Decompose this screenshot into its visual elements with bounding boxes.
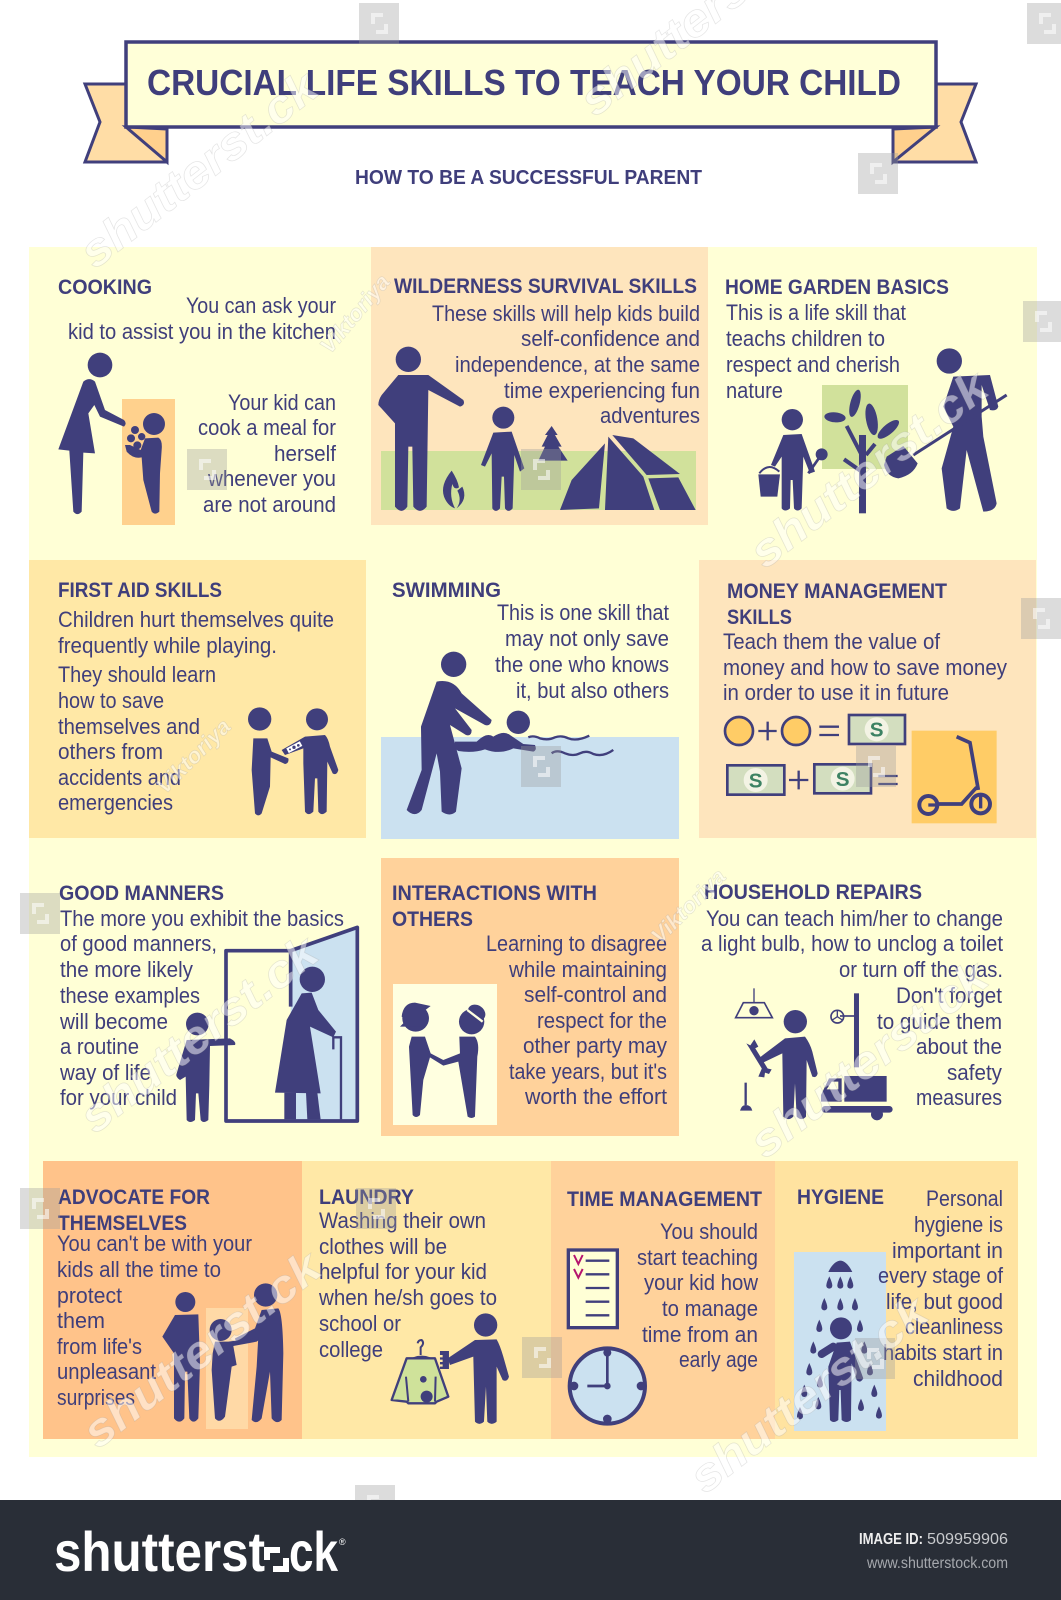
icon: adults protecting child [162,1283,283,1422]
advocate background [43,1161,302,1439]
image id: IMAGE ID: [859,1531,923,1548]
watermark overlay: shutterst.ck [739,949,999,1168]
first aid text [58,607,334,815]
interactions text [486,931,667,1109]
hygiene heading: HYGIENE [797,1186,884,1209]
first aid text: emergencies [58,790,173,815]
good manners text: will become [59,1009,168,1034]
first aid text: accidents and [58,765,181,790]
cooking text: Your kid can [228,390,336,415]
good manners text: a routine [60,1034,139,1059]
icon: money equation and scooter: S [836,768,850,791]
footer bar [0,1500,1061,1600]
first aid text: how to save [58,688,164,713]
laundry text: helpful for your kid [319,1259,487,1284]
main background panel [29,247,1037,1457]
icon: checklist [568,1250,617,1328]
household heading: HOUSEHOLD REPAIRS [704,881,922,904]
wilderness text: self-confidence and [521,326,700,351]
first aid text: They should learn [58,662,216,687]
interactions text: self-control and [524,982,667,1007]
money heading: MONEY MANAGEMENT [727,580,947,603]
interactions text: other party may [523,1033,667,1058]
laundry text: school or [319,1311,401,1336]
hygiene text: important in [892,1238,1003,1263]
swimming heading: SWIMMING [392,579,501,602]
interactions text: respect for the [537,1008,667,1033]
wilderness text: These skills will help kids build [432,301,700,326]
panel: household repairs [701,881,1003,1120]
hygiene text: cleanliness [905,1314,1003,1339]
interactions background [381,858,679,1136]
subtitle: HOW TO BE A SUCCESSFUL PARENT [355,166,702,189]
good manners text: way of life [59,1060,151,1085]
laundry text [318,1208,497,1362]
interactions text: worth the effort [524,1084,667,1109]
panel: swimming [381,579,679,839]
garden text: nature [726,378,783,403]
white picture box [393,984,497,1125]
advocate heading [58,1186,210,1235]
image id [859,1531,1008,1548]
swimming text: This is one skill that [497,600,669,625]
panel: good manners [59,882,357,1122]
panel: first aid skills [29,560,366,838]
cooking text: kid to assist you in the kitchen [68,319,336,344]
website: www.shutterstock.com [866,1555,1008,1572]
first aid text: others from [58,739,163,764]
icon: clock [570,1348,645,1424]
laundry background [302,1161,551,1439]
wilderness green ground [381,451,696,510]
time text: to manage [662,1296,758,1321]
icon: person brushing jacket [392,1313,509,1424]
time text: You should [660,1219,758,1244]
money heading: SKILLS [727,606,792,629]
water [381,737,679,839]
interactions heading: OTHERS [392,908,473,931]
banner main [126,42,936,127]
icon: children with bandage [248,707,338,815]
first aid heading: FIRST AID SKILLS [58,579,222,602]
interactions heading: INTERACTIONS WITH [392,882,597,905]
household text [701,906,1003,1110]
advocate text: protect [57,1283,122,1308]
wilderness background [371,247,708,525]
hygiene text: life, but good [886,1289,1003,1314]
panel: wilderness survival skills [371,247,708,525]
banner left ribbon [85,84,167,162]
time text: time from an [642,1322,758,1347]
title banner [85,42,976,162]
garden text: teachs children to [726,326,885,351]
hygiene text: childhood [913,1366,1003,1391]
icon: gardeners and plant [758,348,1007,513]
advocate text: surprises [57,1385,135,1410]
panel: hygiene [775,1161,1018,1439]
panel: advocate for themselves [43,1161,302,1439]
first aid text: Children hurt themselves quite [58,607,334,632]
money background [699,560,1036,838]
panel: time management [551,1161,775,1439]
cooking heading: COOKING [58,276,152,299]
good manners text: of good manners, [60,931,217,956]
image id: 509959906 [927,1531,1008,1548]
time text [637,1219,758,1372]
time text: start teaching [637,1245,758,1270]
household text: or turn off the gas. [839,957,1003,982]
panel: home garden basics [725,276,1007,513]
footer background [0,1500,1061,1600]
hygiene text: every stage of [878,1263,1004,1288]
laundry text: college [319,1337,383,1362]
advocate heading: THEMSELVES [58,1212,187,1235]
time heading: TIME MANAGEMENT [567,1188,762,1211]
money text [723,629,1007,705]
good manners text: these examples [60,983,200,1008]
advocate text: them [57,1308,105,1333]
icon: mother and child with food [58,353,165,514]
watermark overlay: Viktoriya [646,864,731,949]
icon: repair person with tools [736,988,893,1120]
time background [551,1161,775,1439]
advocate heading: ADVOCATE FOR [58,1186,210,1209]
icon: money equation and scooter [725,715,997,823]
good manners text [59,906,344,1110]
time text: your kid how [644,1270,758,1295]
money text: in order to use it in future [723,680,949,705]
icon: handshake [400,1001,488,1118]
hygiene text: habits start in [883,1340,1003,1365]
swimming text: may not only save [505,626,669,651]
household text: about the [916,1034,1002,1059]
wilderness text [432,301,700,428]
shower blue box [794,1252,886,1431]
interactions text: take years, but it's [509,1059,667,1084]
watermark overlay: Viktoriya [315,269,395,358]
household text: safety [947,1060,1002,1085]
first aid text: frequently while playing. [58,633,277,658]
cooking text: are not around [203,492,336,517]
household text: measures [916,1085,1002,1110]
banner right ribbon [893,84,976,162]
advocate text: kids all the time to [57,1257,221,1282]
garden green box [822,385,908,469]
hygiene text [878,1186,1004,1391]
hygiene text: Personal [926,1186,1003,1211]
household text: You can teach him/her to change [706,906,1003,931]
watermark overlay: shutterst.ck [72,1239,332,1458]
garden text: This is a life skill that [726,300,906,325]
garden text [726,300,906,403]
interactions text: Learning to disagree [486,931,667,956]
advocate light box [206,1308,248,1429]
hygiene background [775,1161,1018,1439]
good manners heading: GOOD MANNERS [59,882,224,905]
cooking text [68,293,337,517]
hygiene text: hygiene is [914,1212,1003,1237]
good manners text: the more likely [60,957,193,982]
icon: child holding door for elderly woman [176,927,357,1122]
advocate text [57,1231,252,1410]
panel: cooking [58,276,337,525]
swimming text: it, but also others [516,678,669,703]
panel: interactions with others [381,858,679,1136]
wilderness heading: WILDERNESS SURVIVAL SKILLS [394,275,697,298]
watermark overlay: shutterst.ck [69,59,329,278]
shutterstock logo: ® [339,1537,346,1547]
wilderness text: adventures [600,403,700,428]
garden heading: HOME GARDEN BASICS [725,276,949,299]
money heading [727,580,947,629]
good manners text: The more you exhibit the basics [60,906,344,931]
watermark overlay: shutterst.ck [739,359,999,578]
icon: child in shower [797,1261,882,1422]
shutterstock logo: ck [289,1520,339,1583]
interactions text: while maintaining [508,957,667,982]
household text: a light bulb, how to unclog a toilet [701,931,1003,956]
interactions heading [392,882,597,931]
wilderness text: time experiencing fun [504,378,700,403]
panel: laundry [302,1161,551,1439]
swimming text: the one who knows [495,652,669,677]
first aid text: themselves and [58,714,200,739]
cooking text: You can ask your [186,293,336,318]
laundry text: when he/sh goes to [318,1285,497,1310]
money text: Teach them the value of [723,629,941,654]
advocate text: unpleasant [57,1359,156,1384]
watermark overlay: shutterst.ck [679,1284,939,1503]
icon: camp scene [378,347,696,511]
first aid background [29,560,366,838]
laundry text: clothes will be [319,1234,447,1259]
wilderness text: independence, at the same [455,352,700,377]
icon: money equation and scooter: S [870,719,884,742]
laundry heading: LAUNDRY [319,1186,414,1209]
laundry text: Washing their own [319,1208,486,1233]
good manners text: for your child [60,1085,177,1110]
watermark overlay: shutterst.ck [69,924,329,1143]
time text: early age [679,1347,758,1372]
advocate text: from life's [57,1334,142,1359]
icon: money equation and scooter: S [749,769,763,792]
swimming text [495,600,669,703]
household text: to guide them [877,1009,1002,1034]
cooking text: herself [274,441,337,466]
household text: Don't forget [896,983,1002,1008]
icon: adult teaching child to swim [407,652,613,814]
cooking accent box [122,399,175,525]
garden text: respect and cherish [726,352,900,377]
shutterstock logo: shutterst [54,1520,265,1583]
panel: money management skills [699,560,1036,838]
watermark overlay: Viktoriya [151,714,236,799]
cooking text: whenever you [207,466,336,491]
advocate text: You can't be with your [57,1231,252,1256]
cooking text: cook a meal for [198,415,336,440]
money text: money and how to save money [723,655,1007,680]
title text: CRUCIAL LIFE SKILLS TO TEACH YOUR CHILD [147,62,901,103]
